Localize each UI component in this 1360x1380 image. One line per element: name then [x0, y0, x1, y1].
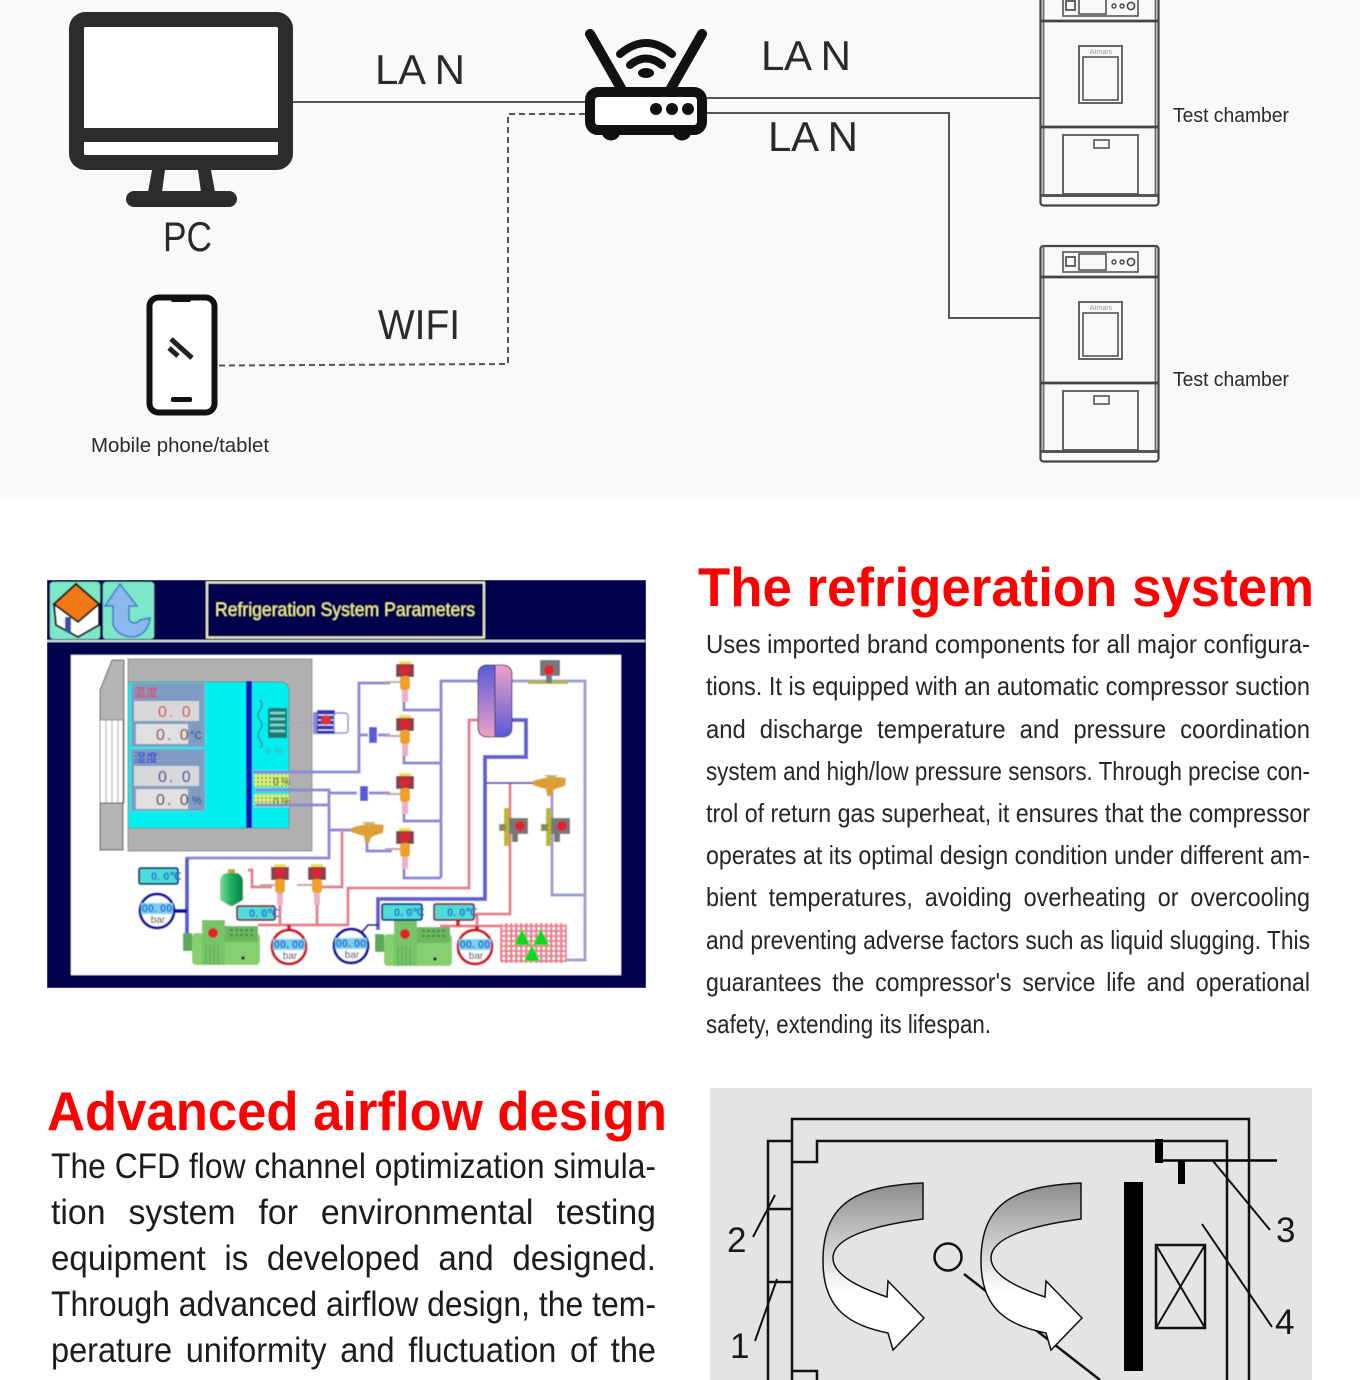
- icon: home button: [50, 582, 100, 639]
- condenser coil: [500, 923, 567, 963]
- temperature readout: 温度: [134, 685, 158, 700]
- number labels: 3: [1276, 1211, 1295, 1250]
- panel: airflow schematic: [710, 1088, 1312, 1380]
- temperature readout: [131, 683, 205, 747]
- text block: airflow description: perature uniformity and fluctuation of the: [51, 1331, 656, 1370]
- temperature boxes: 0. 0℃: [249, 908, 280, 920]
- text block: airflow description: tion system for environmental testing: [51, 1193, 656, 1232]
- receiver tank: [220, 869, 243, 906]
- icon: wifi router: [590, 34, 702, 140]
- humidity readout: 湿度: [134, 750, 158, 765]
- temperature readout: 0. 0: [158, 704, 193, 721]
- text block: refrigeration system description: tions. It is equipped with an automatic compressor suction: [706, 671, 1310, 701]
- icon: back arrow button: [103, 582, 154, 639]
- temperature boxes: [139, 868, 478, 920]
- text block: airflow description: The CFD flow channel optimization simula-: [51, 1147, 656, 1186]
- panel: network diagram background: [0, 0, 1360, 497]
- white diagram area: [71, 655, 621, 975]
- network connection lines: [219, 98, 1040, 366]
- pressure gauges: bar: [151, 915, 166, 926]
- chamber schematic: 0 %: [273, 797, 290, 808]
- title box: Refrigeration System Parameters: [215, 599, 475, 621]
- panel: refrigeration system parameters screen: [47, 580, 646, 988]
- motor: [313, 710, 348, 734]
- label: LAN upper: LA N: [761, 32, 851, 79]
- compressors: [183, 920, 452, 966]
- text block: airflow description: Through advanced airflow design, the tem-: [51, 1285, 656, 1324]
- label: test chamber upper: Test chamber: [1173, 105, 1289, 127]
- icon: test chamber upper: [1040, 0, 1158, 206]
- airflow arrow left: [823, 1183, 924, 1350]
- title box: [207, 582, 484, 638]
- humidity readout: %: [192, 795, 202, 807]
- heat exchanger box: [1156, 1245, 1205, 1328]
- pressure gauges: 00. 00: [274, 939, 304, 951]
- label: WIFI: WIFI: [378, 301, 460, 348]
- pressure gauges: bar: [469, 951, 484, 962]
- chamber schematic: 0 %: [265, 746, 284, 756]
- icon: mobile phone: [150, 296, 214, 412]
- airflow outlet line: [964, 1274, 1100, 1380]
- pressure gauges: bar: [283, 951, 298, 962]
- separator tank: [478, 665, 512, 737]
- text block: refrigeration system description: and discharge temperature and pressure coordination: [706, 714, 1310, 744]
- expansion and solenoid valves: [260, 660, 570, 905]
- number labels: 1: [730, 1327, 749, 1366]
- text block: airflow description: [51, 1147, 656, 1370]
- icon: test chamber lower: [1040, 246, 1158, 462]
- pressure gauges: 00. 00: [460, 939, 490, 951]
- humidity readout: 0. 0: [158, 769, 193, 786]
- temperature boxes: 0. 0℃: [447, 907, 478, 919]
- number labels: 2: [727, 1221, 746, 1260]
- chamber schematic: 0 %: [273, 777, 290, 788]
- label: PC: PC: [163, 213, 212, 260]
- label: mobile phone/tablet: Mobile phone/tablet: [91, 435, 269, 457]
- label: LAN to PC: LA N: [375, 46, 465, 93]
- text block: refrigeration system description: safety, extending its lifespan.: [706, 1009, 991, 1039]
- number labels: 4: [1275, 1303, 1294, 1342]
- temperature readout: °C: [190, 730, 202, 742]
- temperature boxes: 0. 0℃: [394, 907, 425, 919]
- pressure gauges: [140, 894, 492, 964]
- humidity readout: [131, 749, 205, 811]
- pressure gauges: 00. 00: [336, 938, 366, 950]
- text block: airflow description: equipment is developed and designed.: [51, 1239, 656, 1278]
- text block: refrigeration system description: Uses imported brand components for all major configura-: [706, 629, 1310, 659]
- humidity readout: 0. 0: [156, 792, 191, 809]
- label: LAN lower: LA N: [768, 113, 858, 160]
- leader lines: [753, 1161, 1272, 1341]
- label: test chamber lower: Test chamber: [1173, 369, 1289, 391]
- fan circle: [934, 1244, 962, 1270]
- text block: refrigeration system description: [706, 629, 1310, 1039]
- refrigerant pipes: [187, 681, 585, 960]
- icon: PC monitor: [76, 20, 286, 207]
- heading: the refrigeration system: The refrigeration system: [698, 556, 1314, 618]
- chamber walls: [768, 1119, 1249, 1380]
- heading: advanced airflow design: Advanced airflow design: [47, 1080, 667, 1142]
- pressure gauges: bar: [345, 950, 360, 961]
- chamber schematic: [100, 659, 312, 851]
- number labels: [727, 1211, 1295, 1366]
- airflow arrow right: [981, 1183, 1082, 1350]
- text block: refrigeration system description: bient temperatures, avoiding overheating or overcooling: [706, 882, 1310, 912]
- pressure gauges: 00. 00: [142, 903, 172, 915]
- temperature boxes: 0. 0℃: [151, 871, 182, 883]
- temperature readout: 0. 0: [156, 727, 191, 744]
- sensors: [1155, 1139, 1277, 1184]
- baffle plate: [1124, 1182, 1143, 1371]
